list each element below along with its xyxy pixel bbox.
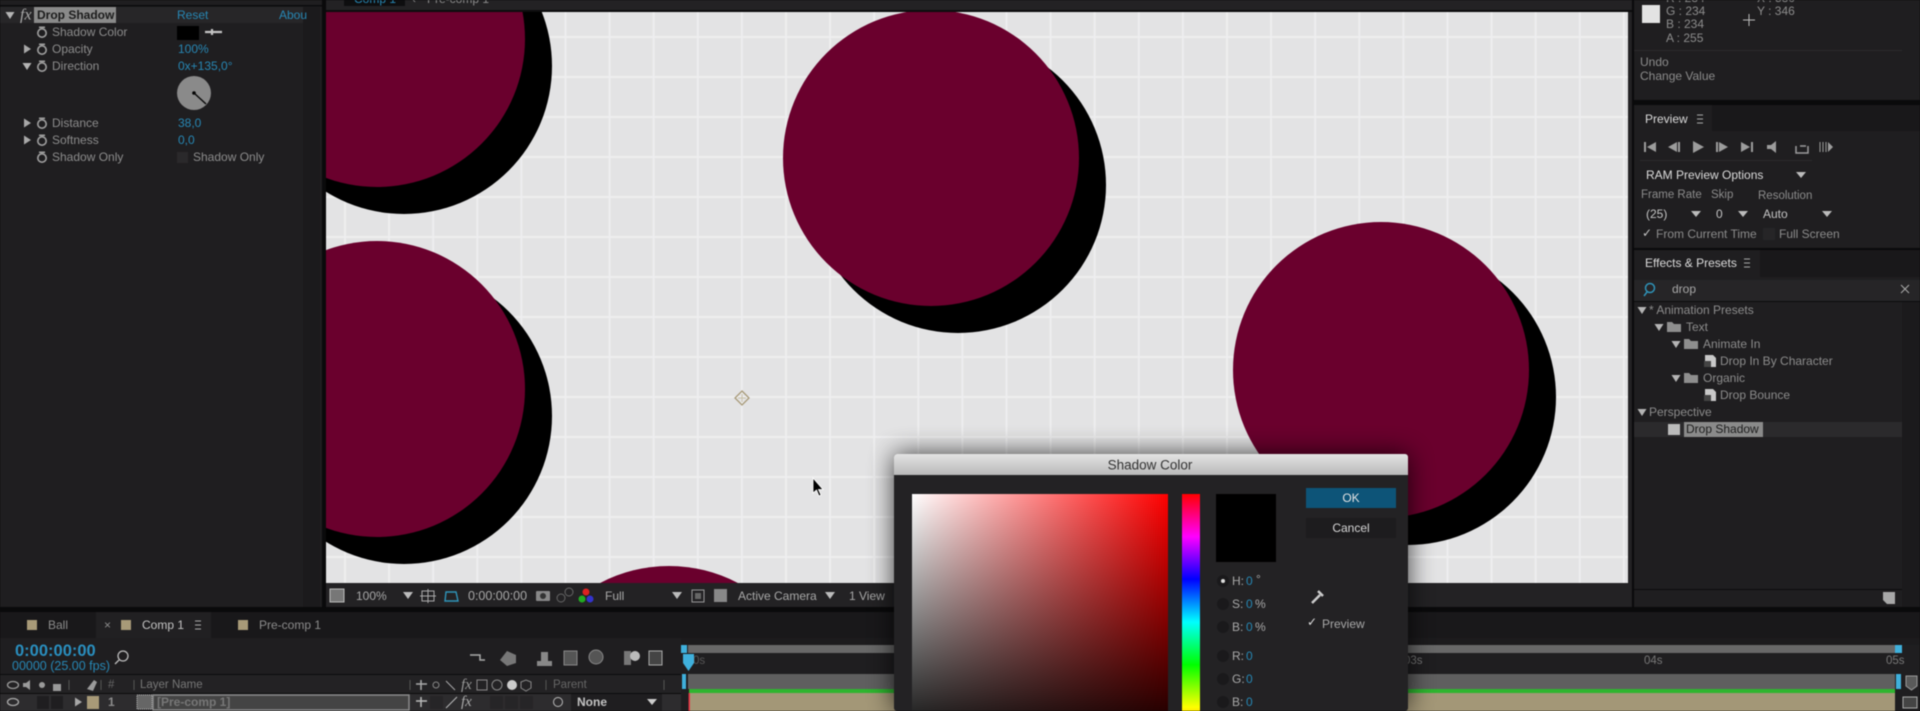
current time: 00000 (25.00 fps) [12, 659, 110, 673]
color value fields: B: [1232, 620, 1243, 634]
color value fields: R: [1232, 649, 1244, 663]
effects heading: Effects & Presets [1645, 256, 1737, 270]
viewer toolbar: 100% [356, 589, 387, 603]
property: softness [24, 133, 195, 147]
color value fields: % [1255, 620, 1266, 634]
timeline tabs: Pre-comp 1 [259, 618, 321, 632]
time ruler and tracks: 0s [693, 655, 705, 667]
search field [1634, 280, 1920, 301]
effect header: drop shadow: Reset [177, 8, 209, 22]
ram preview options: RAM Preview Options [1646, 168, 1763, 182]
ram preview options: ✓ [1642, 226, 1652, 240]
color value fields: 0 [1246, 672, 1253, 686]
preset tree: Drop Bounce [1720, 388, 1790, 402]
dialog title bar: Shadow Color [1108, 458, 1193, 472]
property: opacity [24, 42, 209, 56]
property: softness: Softness [52, 133, 99, 147]
color value fields: 0 [1246, 574, 1253, 588]
column header [0, 675, 681, 693]
hue slider [1182, 494, 1200, 711]
color value fields [1217, 572, 1266, 709]
panel: info [1634, 0, 1920, 100]
preset tree: Perspective [1649, 405, 1712, 419]
cancel button: Cancel [1332, 521, 1370, 535]
color value fields: H: [1232, 574, 1244, 588]
panel: preview [1634, 105, 1920, 248]
viewer toolbar [326, 583, 1632, 607]
info values [1666, 0, 1795, 45]
layer row [0, 694, 681, 711]
ram preview options: Auto [1763, 207, 1788, 221]
layer row: [Pre-comp 1] [157, 695, 230, 709]
column header: fx [461, 677, 472, 693]
search field: drop [1672, 282, 1696, 296]
color value fields: 0 [1246, 649, 1253, 663]
ball: right [1233, 222, 1556, 545]
dialog title bar [894, 454, 1408, 475]
timeline tabs: × [104, 618, 111, 632]
property: distance: 38,0 [178, 116, 202, 130]
color value fields: B: [1232, 695, 1243, 709]
layer search icon [115, 651, 128, 664]
info color swatch [1642, 5, 1660, 23]
mouse cursor [813, 478, 823, 496]
color value fields: 0 [1246, 597, 1253, 611]
ram preview options: From Current Time [1656, 227, 1757, 241]
undo text: Undo [1640, 55, 1669, 69]
time ruler and tracks: 04s [1644, 655, 1663, 667]
property: direction [22, 59, 233, 73]
info values: A : 255 [1666, 31, 1704, 45]
property: opacity: 100% [178, 42, 209, 56]
playback controls [1644, 141, 1833, 153]
color preview swatch [1216, 494, 1276, 562]
ram preview options: Skip [1711, 189, 1733, 201]
preview checkbox: ✓ [1307, 615, 1317, 629]
ball: top left [325, 11, 553, 215]
ball: top center [783, 10, 1106, 333]
preset tree: * Animation Presets [1649, 303, 1754, 317]
preset tree: Organic [1703, 371, 1745, 385]
ball: bottom [600, 566, 738, 583]
breadcrumb tabs [344, 0, 489, 6]
undo text: Change Value [1640, 69, 1715, 83]
preset tree: Animate In [1703, 337, 1760, 351]
anchor point [735, 391, 749, 405]
viewer toolbar: 1 View [849, 589, 885, 603]
color value fields: % [1255, 597, 1266, 611]
info values: G : 234 [1666, 4, 1706, 18]
timeline tabs [27, 612, 321, 638]
color value fields: ° [1256, 572, 1261, 586]
preset tree: Drop In By Character [1720, 354, 1833, 368]
saturation and brightness field [912, 494, 1168, 711]
time ruler and tracks: 03s [1404, 655, 1423, 667]
playhead [683, 654, 694, 711]
effect header: drop shadow: fx [20, 6, 32, 24]
ram preview options: Frame Rate [1641, 189, 1702, 201]
effect header: drop shadow: Abou [279, 8, 307, 22]
ram preview options: Resolution [1758, 190, 1812, 202]
timeline switches [470, 650, 662, 666]
layer row: fx [461, 694, 472, 710]
undo text [1640, 55, 1715, 83]
ram preview options: (25) [1646, 207, 1667, 221]
color value fields: 0 [1246, 620, 1253, 634]
layer row: 1 [108, 695, 115, 709]
preset tree [1634, 303, 1902, 437]
preview heading: Preview [1645, 112, 1688, 126]
panel: composition viewer [229, 0, 1632, 607]
info values: B : 234 [1666, 17, 1704, 31]
eyedropper icon [1312, 591, 1323, 603]
property: shadow color: Shadow Color [52, 25, 127, 39]
property: opacity: Opacity [52, 42, 93, 56]
property: shadow only: Shadow Only [193, 150, 264, 164]
property: direction: Direction [52, 59, 99, 73]
property: direction: 0x+135,0° [178, 59, 233, 73]
time ruler and tracks [681, 645, 1920, 711]
ram preview options [1641, 168, 1840, 241]
dialog: shadow color picker [894, 454, 1408, 711]
layer row: None [577, 695, 607, 709]
ok button [1306, 488, 1396, 508]
color value fields: 0 [1246, 695, 1253, 709]
preview checkbox: Preview [1322, 617, 1365, 631]
viewer toolbar: Active Camera [738, 589, 817, 603]
column header: Parent [553, 679, 588, 691]
color value fields: S: [1232, 597, 1243, 611]
property: softness: 0,0 [178, 133, 195, 147]
info values: Y : 346 [1757, 4, 1795, 18]
timeline tabs: Comp 1 [142, 618, 184, 632]
timeline tabs: Ball [48, 618, 68, 632]
ram preview options: Full Screen [1779, 227, 1840, 241]
property: shadow only [38, 150, 264, 164]
property: distance: Distance [52, 116, 99, 130]
new preset icon [1883, 592, 1895, 604]
effect header: drop shadow [6, 6, 307, 24]
panel: effect controls [0, 0, 322, 607]
preset tree: Text [1686, 320, 1709, 334]
current time [12, 642, 110, 673]
property: distance [24, 116, 202, 130]
time ruler and tracks: 05s [1886, 655, 1905, 667]
current time: 0:00:00:00 [15, 642, 96, 660]
effect header: drop shadow: Drop Shadow [37, 8, 115, 22]
ram preview options: 0 [1716, 207, 1723, 221]
canvas with balls [229, 0, 1628, 583]
preset tree: Drop Shadow [1686, 422, 1759, 436]
viewer toolbar: Full [605, 589, 624, 603]
panel: effects and presets [1634, 250, 1920, 607]
ball: middle left [325, 240, 553, 565]
color value fields: G: [1232, 672, 1245, 686]
column header: # [108, 679, 115, 691]
property: shadow only: Shadow Only [52, 150, 123, 164]
column header: Layer Name [140, 679, 203, 691]
viewer toolbar: 0:00:00:00 [468, 589, 527, 603]
cancel button [1332, 523, 1370, 532]
panel: timeline [0, 612, 1920, 711]
preview checkbox [1308, 618, 1366, 629]
direction dial [177, 76, 211, 110]
ok button: OK [1342, 491, 1360, 505]
property: shadow color [38, 25, 222, 40]
